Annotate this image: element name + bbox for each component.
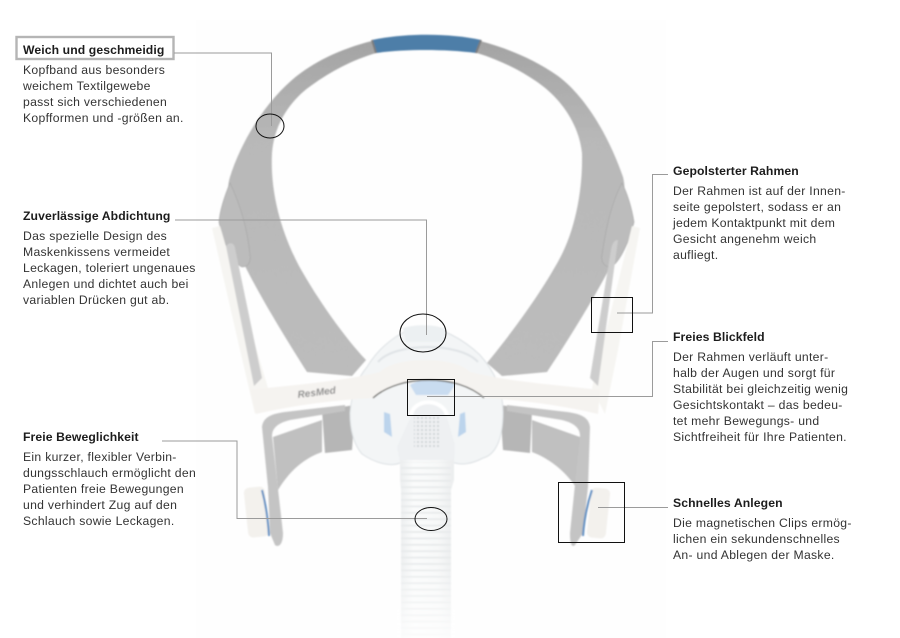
text: Freie Beweglichkeit: Ein kurzer, flexibler Verbin- — [23, 450, 177, 464]
text: Zuverlässige Abdichtung: Das spezielle Design des — [23, 228, 167, 242]
text: Zuverlässige Abdichtung: Zuverlässige Abdichtung — [23, 209, 170, 223]
text: Gepolsterter Rahmen — [672, 164, 846, 262]
side tabs — [219, 183, 250, 267]
tube — [400, 460, 454, 638]
text: Gepolsterter Rahmen: seite gepolstert, sodass er an — [673, 200, 841, 214]
text: Gepolsterter Rahmen: Der Rahmen ist auf der Innen- — [673, 184, 846, 198]
blue top strap — [372, 35, 481, 53]
text: Gepolsterter Rahmen: jedem Kontaktpunkt mit dem — [673, 216, 835, 230]
lower straps — [273, 420, 322, 490]
text: Freie Beweglichkeit: dungsschlauch ermöglicht den — [23, 466, 196, 480]
text: Freies Blickfeld: Sichtfreiheit für Ihre Patienten. — [673, 430, 847, 444]
cushion — [350, 327, 503, 465]
text: Freies Blickfeld: Freies Blickfeld — [673, 330, 765, 344]
elbow — [397, 403, 455, 462]
text: Schnelles Anlegen — [673, 496, 852, 562]
upper frame arms — [212, 226, 268, 414]
text: Weich und geschmeidig — [23, 43, 184, 124]
callout line: Freies Blickfeld — [408, 342, 668, 416]
text: Zuverlässige Abdichtung — [23, 209, 196, 306]
text: Weich und geschmeidig: Kopfband aus besonders — [23, 62, 165, 76]
text: Zuverlässige Abdichtung: Maskenkissens vermeidet — [23, 244, 170, 258]
text: Freie Beweglichkeit: Schlauch sowie Leckagen. — [23, 514, 175, 528]
callout line: Zuverlässige Abdichtung — [175, 220, 446, 352]
callout line: Weich und geschmeidig — [16, 37, 284, 138]
background wash — [196, 20, 666, 638]
text: Freies Blickfeld: tet mehr Bewegungs- und — [673, 414, 819, 428]
text: Weich und geschmeidig: Weich und geschmeidig — [23, 43, 164, 57]
front frame band — [250, 360, 600, 414]
text: Gepolsterter Rahmen: Gesicht angenehm weich — [673, 232, 816, 246]
headband — [228, 41, 625, 376]
text: Schnelles Anlegen: Die magnetischen Clips ermög- — [673, 516, 852, 530]
text: Weich und geschmeidig: passt sich verschiedenen — [23, 94, 167, 108]
text: Schnelles Anlegen: Schnelles Anlegen — [673, 496, 783, 510]
magnetic clips — [243, 486, 270, 538]
text: Freies Blickfeld: halb der Augen und sorgt für — [673, 366, 835, 380]
logo: ResMed — [297, 385, 337, 401]
text: Freies Blickfeld: Stabilität bei gleichzeitig wenig — [673, 382, 848, 396]
callout line: Freie Beweglichkeit — [162, 441, 447, 530]
text: Weich und geschmeidig: weichem Textilgewebe — [23, 78, 151, 92]
text: Schnelles Anlegen: An- und Ablegen der Maske. — [673, 548, 835, 562]
text: Freie Beweglichkeit: Patienten freie Bewegungen — [23, 482, 184, 496]
text: Freie Beweglichkeit: Freie Beweglichkeit — [23, 430, 139, 444]
text: Freies Blickfeld: Der Rahmen verläuft unter- — [673, 350, 828, 364]
callout line: Schnelles Anlegen — [558, 482, 668, 542]
text: Freie Beweglichkeit: und verhindert Zug auf den — [23, 498, 177, 512]
callout line: Gepolsterter Rahmen — [592, 174, 668, 332]
text: Zuverlässige Abdichtung: Anlegen und dichtet auch bei — [23, 276, 189, 290]
text: Weich und geschmeidig: Kopfformen und -größen an. — [23, 110, 184, 124]
text: Zuverlässige Abdichtung: Leckagen, toleriert ungenaues — [23, 260, 196, 274]
lower grey frame — [262, 405, 345, 546]
icon: mask — [212, 35, 640, 638]
text: Schnelles Anlegen: lichen ein sekundenschnelles — [673, 532, 840, 546]
text: Gepolsterter Rahmen: Gepolsterter Rahmen — [673, 164, 799, 178]
text: Freies Blickfeld: Gesichtskontakt – das bedeu- — [673, 398, 843, 412]
text: Freies Blickfeld — [673, 330, 848, 444]
text: Zuverlässige Abdichtung: variablen Drücken gut ab. — [23, 292, 169, 306]
text: Freie Beweglichkeit — [23, 430, 196, 528]
text: Gepolsterter Rahmen: aufliegt. — [673, 248, 718, 262]
